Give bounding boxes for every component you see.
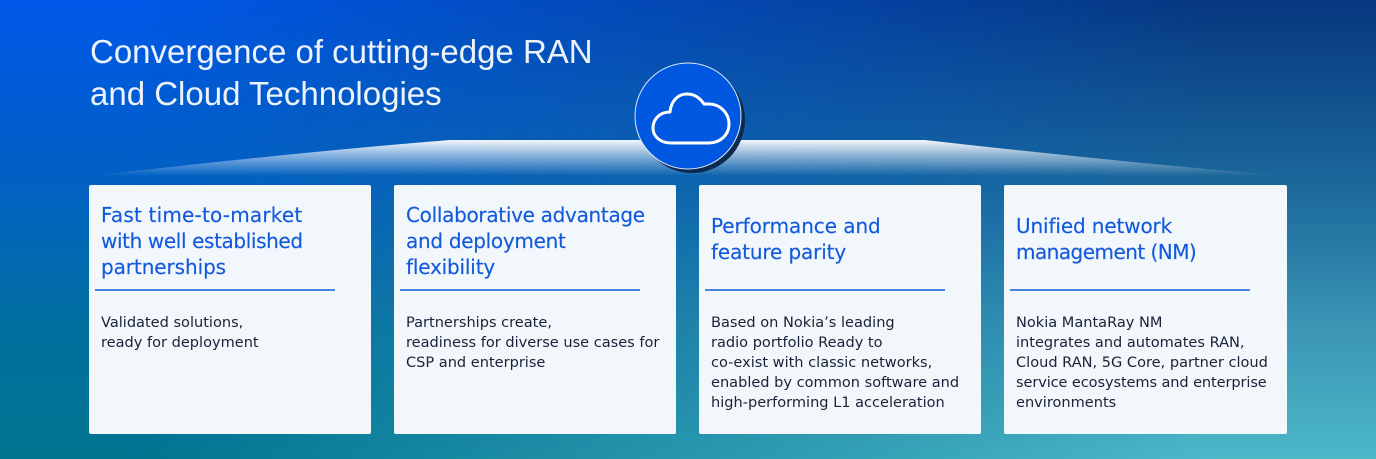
panel: unified network management — [1004, 185, 1287, 434]
heading — [101, 203, 303, 279]
panel: fast time-to-market — [89, 185, 371, 434]
text block: Partnerships create, — [406, 314, 552, 331]
heading: with well established — [101, 229, 303, 253]
heading: Unified network — [1016, 214, 1172, 238]
text block: co-exist with classic networks, — [711, 354, 932, 371]
panel: performance and feature parity — [699, 185, 981, 434]
heading — [406, 203, 645, 279]
text block: Nokia MantaRay NM — [1016, 314, 1162, 331]
heading: Fast time-to-market — [101, 203, 302, 227]
text block: service ecosystems and enterprise — [1016, 374, 1267, 391]
heading: Performance and — [711, 214, 881, 238]
text block: high-performing L1 acceleration — [711, 394, 945, 411]
text block: CSP and enterprise — [406, 354, 545, 371]
title — [90, 33, 593, 112]
text block: enabled by common software and — [711, 374, 959, 391]
panel: collaborative advantage — [394, 185, 676, 434]
text block — [1016, 314, 1268, 411]
heading: partnerships — [101, 255, 226, 279]
text block: integrates and automates RAN, — [1016, 334, 1245, 351]
text block: ready for deployment — [101, 334, 259, 351]
text block: environments — [1016, 394, 1116, 411]
heading: feature parity — [711, 240, 846, 264]
text block: Based on Nokia’s leading — [711, 314, 895, 331]
text block: radio portfolio Ready to — [711, 334, 883, 351]
heading — [711, 214, 881, 264]
text block — [406, 314, 660, 371]
text block — [101, 314, 259, 351]
icon: cloud — [634, 62, 745, 173]
heading: and deployment — [406, 229, 566, 253]
text block: Cloud RAN, 5G Core, partner cloud — [1016, 354, 1268, 371]
title: and Cloud Technologies — [90, 75, 442, 112]
text block: Validated solutions, — [101, 314, 243, 331]
heading — [1016, 214, 1196, 264]
text block — [711, 314, 959, 411]
text block: readiness for diverse use cases for — [406, 334, 659, 351]
heading: flexibility — [406, 255, 495, 279]
title: Convergence of cutting-edge RAN — [90, 33, 593, 70]
heading: management (NM) — [1016, 240, 1196, 264]
heading: Collaborative advantage — [406, 203, 645, 227]
